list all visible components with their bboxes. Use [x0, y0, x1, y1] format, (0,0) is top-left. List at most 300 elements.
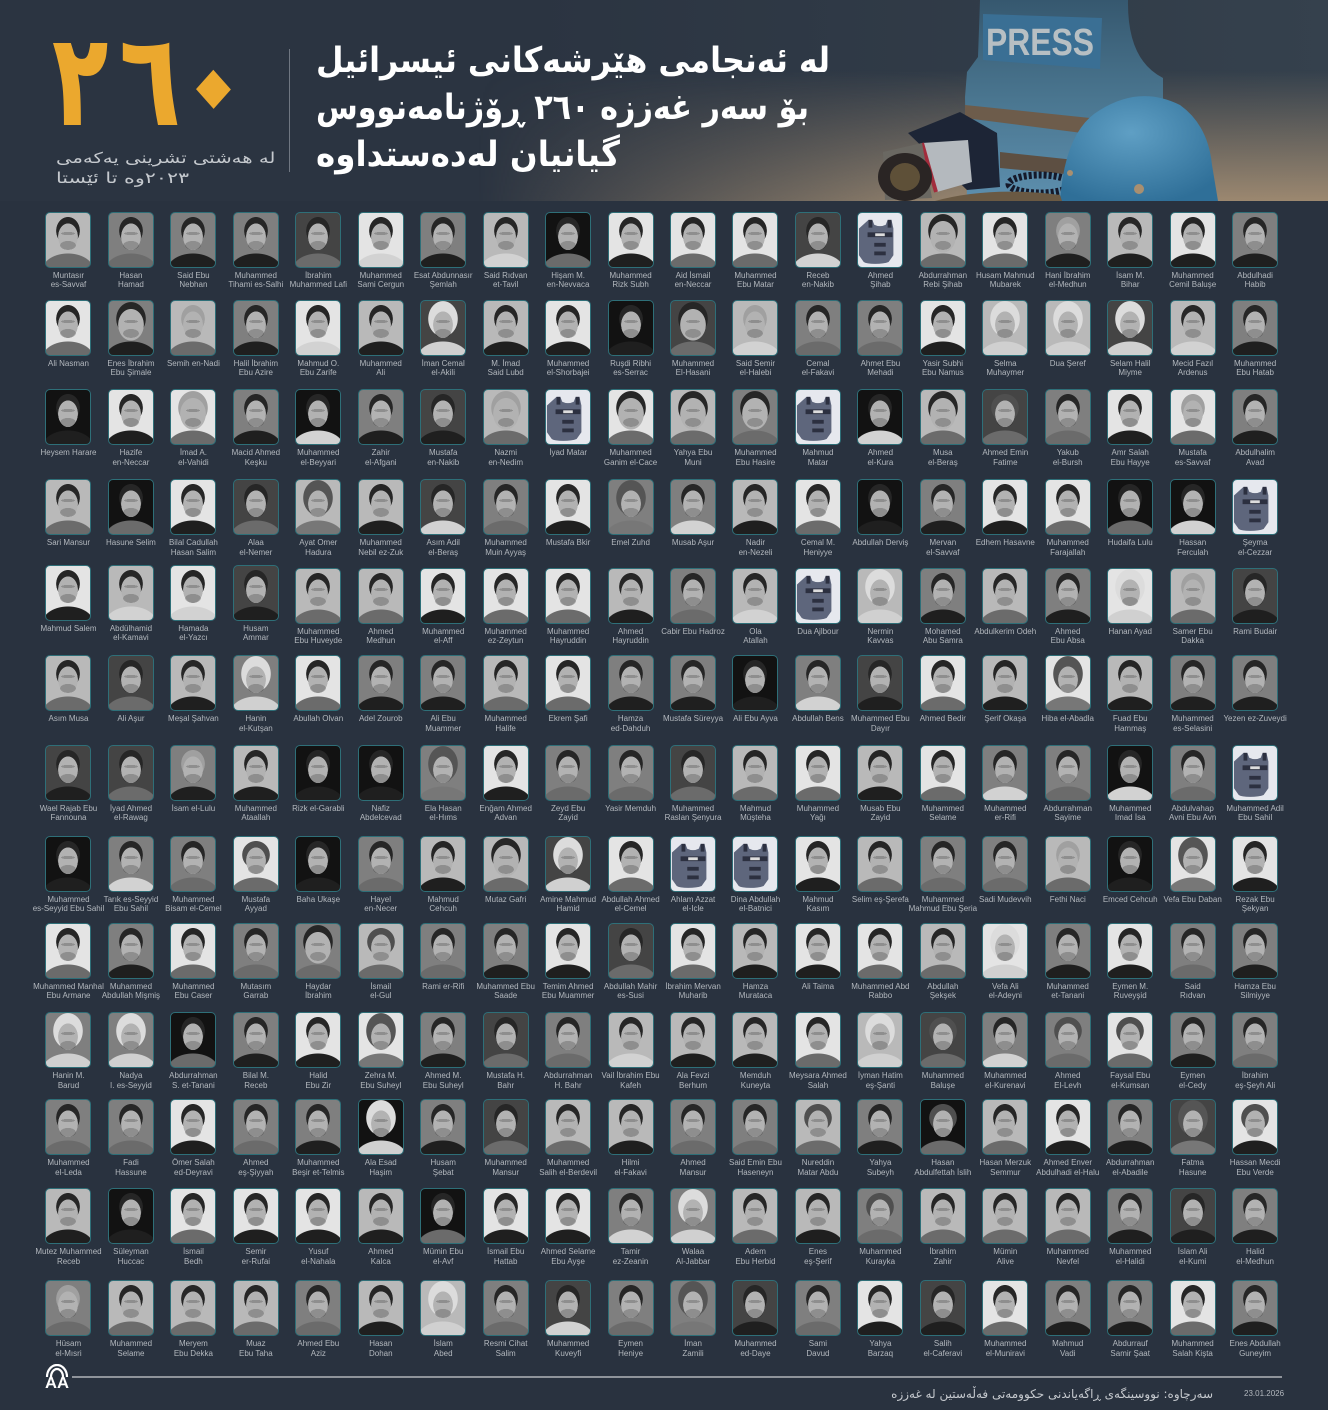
portrait: Fuad Ebu Hammaş: Hammaş: [1114, 724, 1146, 733]
portrait: Hazife en-Neccar: en-Neccar: [112, 458, 149, 466]
portrait: Aid İsmail en-Neccar: [670, 212, 716, 289]
portrait: Macid Ahmed Keşku: [225, 389, 287, 467]
portrait: Mustafa es-Savvaf: Mustafa: [1178, 448, 1207, 457]
portrait: Muaz Ebu Taha: Muaz: [246, 1339, 266, 1348]
portrait: Mustafa Ayyad: Mustafa: [242, 894, 270, 904]
portrait: Ahmed Medhun: Medhun: [366, 636, 395, 645]
portrait: Abdullah Ahmed el-Cemel: Abdullah Ahmed: [601, 894, 660, 904]
portrait: Abdullah Derviş: Abdullah Derviş: [852, 538, 908, 547]
portrait: Muhammed el-Halidi: el-Halidi: [1116, 1257, 1145, 1266]
portrait: Muhammed el-Leda: el-Leda: [55, 1168, 82, 1177]
portrait: Muhammed Nevfel: [1037, 1188, 1099, 1266]
portrait: Temim Ahmed Ebu Muammer: [537, 923, 599, 1001]
portrait: Dina Abdullah el-Batnici: el-Batnici: [739, 904, 772, 913]
portrait: Vefa Ebu Daban: Vefa Ebu Daban: [1164, 894, 1222, 904]
portrait: Ahmed Şihab: Şihab: [870, 280, 891, 289]
portrait: Fatma Hasune: Hasune: [1179, 1168, 1206, 1177]
portrait: Abdulkerim Odeh: [974, 568, 1037, 646]
portrait: Haydar İbrahim: İbrahim: [305, 991, 332, 1000]
source line: سەرچاوە: نووسینگەی ڕاگەیاندنی حکوومەتی فەڵەستین لە غەززە: [891, 1387, 1213, 1401]
portrait: İslam Ali el-Kumi: [1161, 1188, 1224, 1266]
portrait: Abdullah Şekşek: Şekşek: [930, 991, 956, 1000]
portrait: Zeyd Ebu Zayid: Zayid: [558, 813, 578, 822]
portrait: Muhammed et-Tanani: Muhammed: [1047, 982, 1089, 991]
portrait: Yakub el-Bursh: [1037, 389, 1099, 467]
portrait: Hanin M. Barud: Hanin M.: [52, 1071, 84, 1080]
portrait: Muntasır es-Savvaf: Muntasır: [53, 271, 84, 280]
portrait: Hasan Hamad: Hasan: [119, 271, 142, 280]
portrait: İsam M. Bihar: İsam M.: [1116, 271, 1144, 280]
portrait: Hasune Selim: [100, 479, 162, 557]
portrait: Muhammed Beşir et-Telmis: [287, 1099, 350, 1177]
portrait: Mohamed Abu Samra: Mohamed: [925, 626, 961, 636]
portrait: Ahmed Ebu Aziz: Aziz: [311, 1348, 326, 1358]
portrait: Abullah Olvan: Abullah Olvan: [293, 714, 343, 723]
portrait: Ali Taima: [787, 923, 849, 1001]
portrait: Muhammed Tihami es-Salhi: [228, 212, 283, 289]
portrait: Enes İbrahim Ebu Şimale: Ebu Şimale: [110, 368, 151, 377]
portrait: Muhammed Bisam el-Cemel: Bisam el-Cemel: [165, 904, 222, 913]
portrait: Ahmed Emin Fatime: Fatime: [993, 458, 1018, 466]
portrait: Muhammed el-Beyyari: Muhammed: [297, 448, 339, 457]
portrait: Ruşdi Ribhi es-Serrac: [608, 300, 654, 377]
portrait: Muhammed Salah Kişta: Muhammed: [1172, 1339, 1214, 1348]
portrait: Mutaz Gafri: Mutaz Gafri: [485, 894, 526, 904]
portrait: Mustafa Bkir: Mustafa Bkir: [546, 538, 590, 547]
portrait: Mustafa Bkir: [537, 479, 599, 557]
portrait: Ahmed Şihab: Ahmed: [868, 271, 893, 280]
portrait: Hassan Ferculah: Hassan: [1179, 538, 1206, 547]
portrait: Eymen M. Ruveyşid: Eymen M.: [1112, 982, 1148, 991]
portrait: Ahmed Selame Ebu Ayşe: Ahmed Selame: [541, 1247, 595, 1256]
portrait: Mahmud Müşteha: Mahmud: [740, 804, 771, 813]
portrait: Eymen Heniye: Eymen: [618, 1339, 643, 1348]
portrait: Muhammed Ebu Huveyde: Ebu Huveyde: [294, 636, 342, 645]
portrait: Yahya Barzaq: Yahya: [869, 1339, 891, 1348]
portrait: İbrahim Muhammed Lafi: [290, 212, 347, 289]
portrait: Yezen ez-Zuveydi: Yezen ez-Zuveydi: [1223, 714, 1287, 723]
portrait: Tamir ez-Zeanin: ez-Zeanin: [613, 1257, 648, 1266]
portrait: Muhammed Nebil ez-Zuk: Nebil ez-Zuk: [358, 548, 403, 557]
portrait: Hasan Abdulfettah İslih: Hasan: [931, 1158, 954, 1167]
portrait: Ahmed Selame Ebu Ayşe: Ebu Ayşe: [551, 1257, 585, 1266]
portrait: Abdurrahman Rebi Şihab: Abdurrahman: [919, 271, 967, 280]
portrait: Mervan el-Savvaf: Mervan: [929, 538, 956, 547]
portrait: Muhammed Hayruddin: Muhammed: [547, 626, 589, 636]
portrait: Adel Zourob: [350, 655, 412, 733]
portrait: Muhammed Selame: Muhammed: [922, 804, 964, 813]
portrait: İman Zamili: [662, 1280, 724, 1358]
portrait: Abdurrahman el-Abadile: el-Abadile: [1112, 1168, 1148, 1177]
portrait: M. İmad Said Lubd: Said Lubd: [488, 368, 524, 377]
portrait: Mustafa es-Savvaf: [1161, 389, 1224, 467]
portrait: Husam Şebat: Husam: [431, 1158, 456, 1167]
portrait: Fadi Hassune: Fadi: [123, 1158, 139, 1167]
portrait: Cemal el-Fakavi: Cemal: [806, 359, 829, 368]
portrait: Ahmed Selame Ebu Ayşe: [537, 1188, 599, 1266]
portrait: Muhammed Nebil ez-Zuk: Muhammed: [360, 538, 402, 547]
portrait: Ali Ebu Muammer: Muammer: [425, 724, 461, 733]
portrait: Muhammed Muin Ayyaş: Muin Ayyaş: [485, 548, 526, 557]
portrait: İmad A. el-Vahidi: [162, 389, 225, 467]
portrait: Muhammed Farajallah: Muhammed: [1047, 538, 1089, 547]
portrait: Hayel en-Necer: en-Necer: [364, 904, 397, 913]
portrait: Cemal M. Heniyye: Heniyye: [803, 548, 832, 557]
portrait: Enes İbrahim Ebu Şimale: Enes İbrahim: [107, 359, 155, 368]
portrait: Mahmud Vadi: Mahmud: [1052, 1339, 1083, 1348]
portrait: Muhammed el-Kurenavi: Muhammed: [984, 1071, 1026, 1080]
portrait: Dua Ajlbour: [787, 568, 849, 646]
portrait: Mutez Muhammed Receb: Mutez Muhammed: [35, 1247, 102, 1256]
portrait: Muhammed Ganim el-Cace: Muhammed: [609, 448, 652, 457]
portrait: Muhammed Ataallah: Ataallah: [241, 813, 270, 822]
portrait: Ahmed Ebu Aziz: Ahmed Ebu: [297, 1339, 339, 1348]
portrait: Dua Ajlbour: Dua Ajlbour: [797, 626, 839, 636]
portrait: İslam Abed: İslam: [434, 1339, 453, 1348]
portrait: Muhammed Salih el-Berdevil: Muhammed: [547, 1158, 589, 1167]
portrait: Abdulvahap Avni Ebu Avn: Abdulvahap: [1172, 804, 1214, 813]
portrait: Muhammed Ebu Hatab: Ebu Hatab: [1236, 368, 1274, 377]
portrait: Cabir Ebu Hadroz: [662, 568, 724, 646]
portrait: Muhammed el-Muniravi: el-Muniravi: [986, 1348, 1025, 1358]
portrait: Ali Ebu Ayva: [724, 655, 787, 733]
portrait: Hani İbrahim el-Medhun: [1045, 212, 1091, 289]
portrait: Muhammed es-Selasini: [1161, 655, 1224, 733]
portrait: Hassan Ferculah: Ferculah: [1177, 548, 1208, 557]
portrait: Muhammed es-Seyyid Ebu Sahil: es-Seyyid Ebu Sahil: [33, 904, 104, 913]
portrait: Hamza Murataca: Hamza: [743, 982, 768, 991]
portrait: Hazife en-Neccar: [100, 389, 162, 467]
portrait: Mümin Ebu el-Avf: el-Avf: [433, 1257, 453, 1266]
portrait: Samer Ebu Dakka: [1161, 568, 1224, 646]
portrait: İslam Abed: Abed: [434, 1348, 453, 1358]
portrait: Muhammed el-Muniravi: [974, 1280, 1037, 1358]
portrait: Abdurrauf Samir Şaat: [1099, 1280, 1161, 1358]
portrait: Hasan Abdulfettah İslih: [912, 1099, 974, 1177]
portrait: Rezak Ebu Şekyan: [1224, 836, 1286, 914]
portrait: Halid el-Medhun: Halid: [1246, 1247, 1264, 1256]
portrait: Asım Adil el-Beraş: el-Beraş: [428, 548, 458, 557]
portrait: Hamada el-Yazcı: Hamada: [178, 624, 209, 632]
portrait: Abdullah Ahmed el-Cemel: [599, 836, 662, 914]
portrait: Mahmud Cehcuh: Cehcuh: [429, 904, 457, 913]
portrait: Ahmed El-Levh: Ahmed: [1055, 1071, 1080, 1080]
portrait: Receb en-Nakib: Receb: [806, 271, 829, 280]
portrait: Ahmed Ebu Absa: Ahmed: [1055, 626, 1080, 636]
portrait: Hüsam el-Mısri: Hüsam: [56, 1339, 81, 1348]
portrait: Zahir el-Afgani: el-Afgani: [365, 458, 397, 466]
portrait: Ahmed Bedir: [912, 655, 974, 733]
portrait: Abdullah Bens: Abdullah Bens: [792, 714, 844, 723]
portrait: Esat Abdunnasır Şemlah: Şemlah: [430, 280, 457, 289]
portrait: Halid Ebu Zir: [287, 1012, 350, 1090]
portrait: Enes Abdullah Guneyim: Guneyim: [1239, 1348, 1271, 1358]
portrait: Bilal M. Receb: Bilal M.: [243, 1071, 269, 1080]
portrait: Ahmed el-Kura: [849, 389, 912, 467]
portrait: Muntasır es-Savvaf: es-Savvaf: [51, 280, 86, 289]
portrait: Muhammed Ali: Muhammed: [360, 359, 402, 368]
portrait: Süleyman Huccac: Huccac: [118, 1257, 144, 1266]
portrait: Enes eş-Şerif: [787, 1188, 849, 1266]
portrait: Ali Aşur: [100, 655, 162, 733]
portrait: Muhammed es-Selasini: Muhammed: [1172, 714, 1214, 723]
portrait: Abdullah Ahmed el-Cemel: el-Cemel: [615, 904, 647, 913]
portrait: Yusuf el-Nahala: Yusuf: [308, 1247, 328, 1256]
portrait: Ahmed M. Ebu Suheyl: [412, 1012, 474, 1090]
portrait: Mervan el-Savvaf: [912, 479, 974, 557]
portrait: Enğam Ahmed Advan: Advan: [494, 813, 517, 822]
portrait: Bilal M. Receb: [225, 1012, 287, 1090]
portrait: Mecid Fazıl Ardenus: Ardenus: [1178, 368, 1208, 377]
portrait: Enes eş-Şerif: Enes: [809, 1247, 827, 1256]
portrait: Emel Zuhd: [599, 479, 662, 557]
portrait: Mahmud Matar: Mahmud: [802, 448, 833, 457]
portrait: Ala Fevzi Berhum: [662, 1012, 724, 1090]
portrait: Abdullah Mahir es-Susi: Abdullah Mahir: [604, 982, 657, 991]
portrait: Ahmed Medhun: [350, 568, 412, 646]
portrait: Muhammed Ebu Matar: Muhammed: [734, 271, 777, 280]
portrait: Muhammed Cemil Baluşe: Cemil Baluşe: [1169, 280, 1216, 289]
portrait: Muhammed Raslan Şenyura: Muhammed: [672, 804, 714, 813]
portrait: Amine Mahmud Hamid: [537, 836, 599, 914]
portrait: Sadi Mudevvih: [974, 836, 1037, 914]
portrait: Nazmi en-Nedim: en-Nedim: [488, 458, 523, 466]
portrait: Abdurrauf Samir Şaat: Samir Şaat: [1110, 1348, 1150, 1358]
portrait: Mahmud O. Ebu Zarife: Mahmud O.: [297, 359, 339, 368]
portrait: Dina Abdullah el-Batnici: Dina Abdullah: [731, 894, 780, 904]
portrait: Ahmed Mansur: Mansur: [680, 1168, 706, 1177]
portrait: Nermin Kavvas: [849, 568, 912, 646]
portrait: Ayat Omer Hadura: [287, 479, 350, 557]
portrait: Muhammed Kuveyfi: [537, 1280, 599, 1358]
portrait: Yahya Barzaq: [849, 1280, 912, 1358]
portrait: Fethi Naci: Fethi Naci: [1050, 894, 1086, 904]
portrait: Husam Ammar: Ammar: [243, 633, 269, 642]
portrait: Nadir en-Nezeli: en-Nezeli: [739, 548, 772, 557]
portrait: Yasir Subhi Ebu Namus: [920, 300, 966, 377]
portrait: Meryem Ebu Dekka: [162, 1280, 225, 1358]
portrait: Ruşdi Ribhi es-Serrac: Ruşdi Ribhi: [610, 359, 651, 368]
portrait: Ayat Omer Hadura: Ayat Omer: [299, 538, 337, 547]
portrait: Ruşdi Ribhi es-Serrac: es-Serrac: [613, 368, 648, 377]
portrait: Ahmed Ebu Absa: Ebu Absa: [1051, 636, 1085, 645]
portrait: Semih en-Nadi: [167, 300, 220, 368]
portrait: Hasan Dohan: [350, 1280, 412, 1358]
portrait: Mahmud Kasım: Kasım: [807, 904, 829, 913]
portrait: Muhammed ez-Zeytun: Muhammed: [485, 626, 527, 636]
portrait: Abdulhalim Avad: Abdulhalim: [1235, 448, 1275, 457]
portrait: Haydar İbrahim: Haydar: [305, 982, 331, 991]
portrait: Abdullah Mahir es-Susi: [599, 923, 662, 1001]
portrait: Halil İbrahim Ebu Azire: Ebu Azire: [239, 368, 273, 377]
portrait: Said Semir el-Halebi: Said Semir: [736, 359, 775, 368]
portrait: Ahmed eş-Şiyyah: Ahmed: [243, 1158, 269, 1167]
portrait: Abdurrahman Rebi Şihab: Rebi Şihab: [923, 280, 962, 289]
portrait: İbrahim eş-Şeyh Ali: [1224, 1012, 1286, 1090]
portrait: Muhammed ed-Daye: Muhammed: [734, 1339, 777, 1348]
portrait: Abdullah Şekşek: [912, 923, 974, 1001]
portrait: Selam Halil Miyme: Miyme: [1118, 368, 1142, 377]
portrait: Musab Ebu Zayid: Zayid: [871, 813, 890, 822]
portrait: İsam el-Lulu: [162, 745, 225, 823]
portrait: İsmail Ebu Hattab: Hattab: [494, 1257, 517, 1266]
portrait: İman Cemal el-Akili: İman Cemal: [422, 359, 465, 368]
portrait: Sami Davud: Davud: [806, 1348, 829, 1358]
portrait: Emced Cehcuh: [1099, 836, 1161, 914]
portrait: Ahmed Kalca: [350, 1188, 412, 1266]
portrait: İyman Hatim eş-Şanti: eş-Şanti: [866, 1081, 895, 1090]
portrait: İbrahim Zahir: Zahir: [934, 1257, 952, 1266]
portrait: Muhammed ed-Daye: [724, 1280, 787, 1358]
portrait: Hanin el-Kutşan: el-Kutşan: [239, 724, 273, 733]
portrait: Hanin M. Barud: Barud: [58, 1081, 79, 1090]
portrait: Said Rıdvan: Rıdvan: [1180, 991, 1205, 1000]
portrait: Muhammed Selame: Selame: [117, 1348, 144, 1358]
portrait: Mahmud Cehcuh: Mahmud: [428, 894, 459, 904]
portrait: Muhammed Muin Ayyaş: Muhammed: [485, 538, 527, 547]
portrait: Abdulhadi Habib: [1232, 212, 1278, 289]
portrait: Musab Aşur: Musab Aşur: [672, 538, 714, 547]
portrait: Musab Aşur: [662, 479, 724, 557]
portrait: Abdurrahman H. Bahr: Abdurrahman: [544, 1071, 592, 1080]
portrait: İmad A. el-Vahidi: İmad A.: [180, 448, 207, 457]
portrait: Mahmud Cehcuh: [412, 836, 474, 914]
portrait: Muhammed Ebu Saade: Saade: [494, 991, 517, 1000]
portrait: Abdurrahman H. Bahr: H. Bahr: [555, 1081, 582, 1090]
portrait: Muhammed Farajallah: Farajallah: [1050, 548, 1085, 557]
portrait: İyad Matar: İyad Matar: [549, 448, 587, 457]
subtitle: since 7 October 2023: [56, 149, 275, 187]
portrait: İmad A. el-Vahidi: el-Vahidi: [178, 458, 209, 466]
portrait: Haydar İbrahim: [287, 923, 350, 1001]
portrait: Bilal Cadullah Hasan Salim: Bilal Cadullah: [169, 538, 218, 547]
portrait: Alaa el-Nemer: el-Nemer: [239, 548, 272, 557]
portrait: Muhammed Abd Rabbo: [849, 923, 912, 1001]
portrait: Enes Abdullah Guneyim: [1224, 1280, 1286, 1358]
portrait: Muhammed Ebu Hatab: Muhammed: [1234, 359, 1276, 368]
portrait: Ela Hasan el-Hıms: [412, 745, 474, 823]
portrait: İslam Abed: [412, 1280, 474, 1358]
portrait: Muhammed Selame: Muhammed: [110, 1339, 152, 1348]
portrait: Muhammed Ataallah: Muhammed: [235, 804, 277, 813]
portrait: Walaa Al-Jabbar: Walaa: [682, 1247, 704, 1256]
portrait row 2: [45, 300, 1278, 377]
portrait: Hamza Ebu Silmiyye: Silmiyye: [1240, 991, 1270, 1000]
portrait: Mustafa Süreyya: [662, 655, 724, 733]
portrait: Abdulvahap Avni Ebu Avn: [1161, 745, 1224, 823]
portrait: Adem Ebu Herbid: Adem: [745, 1247, 766, 1256]
portrait: Said Ebu Nebhan: [170, 212, 216, 289]
portrait: Ahlam Azzat el-Icle: Ahlam Azzat: [671, 894, 715, 904]
portrait: Muhammed Nevfel: Nevfel: [1056, 1257, 1079, 1266]
portrait: Mahmud Müşteha: [724, 745, 787, 823]
portrait: Vefa Ali el-Adeyni: el-Adeyni: [989, 991, 1022, 1000]
portrait: Musab Ebu Zayid: Musab Ebu: [860, 804, 901, 813]
portrait: Mustafa H. Bahr: Mustafa H.: [486, 1071, 525, 1080]
portrait: Mecid Fazıl Ardenus: Mecid Fazıl: [1172, 359, 1213, 368]
portrait: Mahmud O. Ebu Zarife: Ebu Zarife: [300, 368, 337, 377]
portrait: Hişam M. en-Nevvaca: [545, 212, 591, 289]
portrait: Muhammed el-Shorbajei: el-Shorbajei: [547, 368, 589, 377]
portrait: Amine Mahmud Hamid: Amine Mahmud: [540, 894, 596, 904]
portrait: Macid Ahmed Keşku: Keşku: [245, 458, 267, 466]
portrait: Nafiz Abdelcevad: Nafiz: [372, 804, 390, 813]
portrait: İsmail Ebu Hattab: [474, 1188, 537, 1266]
portrait: Muhammed Salih el-Berdevil: [537, 1099, 599, 1177]
portrait: Yezen ez-Zuveydi: [1224, 655, 1286, 733]
portrait: Muhammed Ebu Hatab: [1224, 300, 1286, 378]
portrait: Nadya I. es-Seyyid: [100, 1012, 162, 1090]
portrait: Muhammed Ebu Dayır: Dayır: [871, 724, 890, 733]
portrait: Said Rıdvan: Said: [1185, 982, 1201, 991]
portrait: Abullah Olvan: [287, 655, 350, 733]
portrait: Muhammed Ebu Hasire: Ebu Hasire: [736, 458, 775, 466]
portrait: Hasan Hamad: Hamad: [118, 280, 144, 289]
portrait: Mümin Ebu el-Avf: [412, 1188, 474, 1266]
portrait: İyad Ahmed el-Rawag: el-Rawag: [114, 813, 148, 822]
portrait: İbrahim Muhammed Lafi: İbrahim: [305, 271, 332, 280]
portrait: Wael Rajab Ebu Fannouna: Wael Rajab Ebu: [40, 804, 97, 813]
portrait: Muhammed et-Tanani: [1037, 923, 1099, 1001]
portrait: Vail İbrahim Ebu Kafeh: Kafeh: [620, 1081, 641, 1090]
portrait: Ahmed El-Levh: El-Levh: [1054, 1081, 1081, 1090]
portrait: Hüsam el-Mısri: [37, 1280, 100, 1358]
portrait: Ali Ebu Muammer: [412, 655, 474, 733]
portrait: Eymen el-Cedy: Eymen: [1180, 1071, 1205, 1080]
portrait: İsmail el-Gul: İsmail: [370, 982, 391, 991]
portrait: Muhammed Baluşe: Baluşe: [931, 1081, 955, 1090]
portrait: Ahmed Enver Abdulhadi el-Halu: [1037, 1099, 1099, 1177]
portrait: Ala Esad Haşim: [350, 1099, 412, 1177]
portrait: Fethi Naci: [1037, 836, 1099, 914]
portrait: Hamada el-Yazcı: el-Yazcı: [179, 633, 208, 642]
portrait: Nureddin Matar Abdu: Nureddin: [802, 1158, 834, 1167]
portrait: Ali Nasman: [45, 300, 91, 368]
portrait: Muhammed Ganim el-Cace: [599, 389, 662, 467]
portrait: İsmail Ebu Hattab: İsmail Ebu: [487, 1247, 524, 1256]
portrait: Yahya Barzaq: Barzaq: [868, 1348, 893, 1358]
portrait: Mustafa H. Bahr: [474, 1012, 537, 1090]
portrait: İman Cemal el-Akili: el-Akili: [431, 368, 455, 377]
portrait: Hamza Ebu Silmiyye: Hamza Ebu: [1234, 982, 1276, 991]
portrait: Yahya Subeyh: [849, 1099, 912, 1177]
portrait: Ala Fevzi Berhum: Ala Fevzi: [677, 1071, 709, 1080]
portrait: Muhammed Kuveyfi: Muhammed: [547, 1339, 589, 1348]
portrait: Yahya Ebu Muni: [662, 389, 724, 467]
portrait: Abdullah Derviş: [849, 479, 912, 557]
portrait: Memduh Kuneyta: [724, 1012, 787, 1090]
portrait: Husam Şebat: [412, 1099, 474, 1177]
portrait: Muhammed el-Halidi: Muhammed: [1109, 1247, 1151, 1256]
portrait: Cabir Ebu Hadroz: Cabir Ebu Hadroz: [661, 626, 725, 636]
portrait: Muhammed el-Beyyari: [287, 389, 350, 467]
portrait: Rizk el-Garabli: Rizk el-Garabli: [292, 804, 345, 813]
portrait: Halid el-Medhun: el-Medhun: [1236, 1257, 1274, 1266]
portrait: Cemal el-Fakavi: el-Fakavi: [802, 368, 834, 377]
portrait: Salih el-Caferavi: el-Caferavi: [923, 1348, 962, 1358]
portrait: Mustafa Ayyad: [225, 836, 287, 914]
portrait: Ahmed Emin Fatime: Ahmed Emin: [982, 448, 1028, 457]
portrait: İsam el-Lulu: İsam el-Lulu: [172, 804, 215, 813]
portrait: Abdülhamid el-Kamavi: [100, 564, 162, 642]
portrait: Esat Abdunnasır Şemlah: [414, 212, 473, 289]
portrait: İman Zamili: İman: [684, 1339, 702, 1348]
portrait: Husam Ammar: [225, 564, 287, 642]
portrait: Muhammed Nevfel: Muhammed: [1047, 1247, 1089, 1256]
portrait: Dua Şeref: [1037, 300, 1099, 378]
portrait: Samer Ebu Dakka: Samer Ebu: [1173, 626, 1213, 636]
portrait: Mutasım Garrab: [225, 923, 287, 1001]
